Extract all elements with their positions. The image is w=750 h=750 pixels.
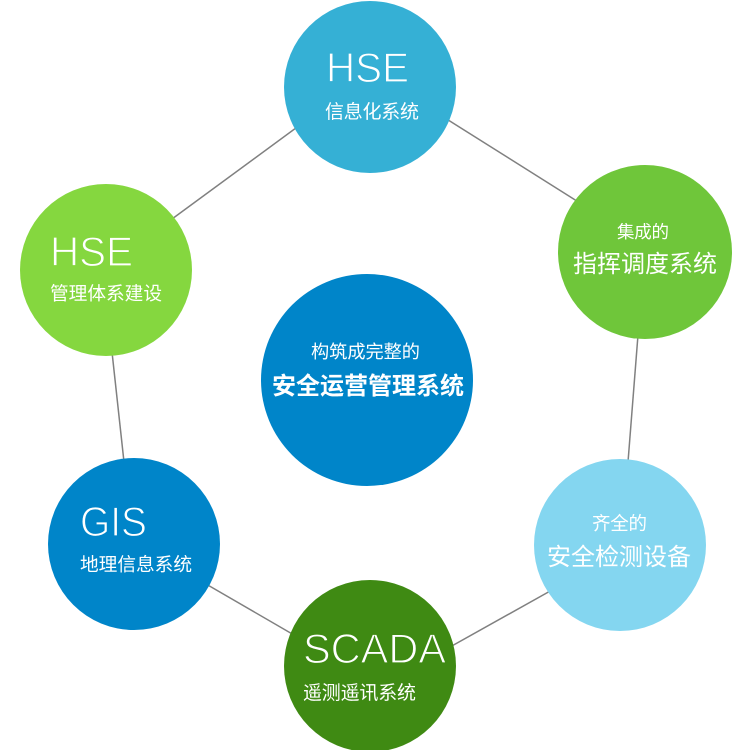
node: safety detection equipment: 齐全的 bbox=[592, 513, 647, 534]
center: safe operation management system bbox=[261, 274, 473, 486]
node: HSE information system: 信息化系统 bbox=[325, 101, 419, 123]
node: GIS bbox=[48, 458, 220, 630]
node: integrated dispatch system: 指挥调度系统 bbox=[573, 251, 717, 278]
node: HSE information system bbox=[284, 1, 456, 173]
connecting hexagon lines bbox=[112, 118, 638, 647]
node: safety detection equipment: 安全检测设备 bbox=[547, 544, 691, 571]
node: HSE management system bbox=[20, 184, 192, 356]
node: HSE management system: 管理体系建设 bbox=[50, 283, 162, 304]
node: SCADA bbox=[284, 580, 456, 750]
node: GIS: 地理信息系统 bbox=[80, 554, 192, 575]
center: safe operation management system: 构筑成完整的 bbox=[311, 342, 420, 362]
node: integrated dispatch system bbox=[558, 165, 732, 339]
node: integrated dispatch system: 集成的 bbox=[617, 222, 669, 242]
node: SCADA: SCADA bbox=[303, 625, 446, 672]
node: HSE management system: HSE bbox=[50, 228, 133, 275]
node: SCADA: 遥测遥讯系统 bbox=[303, 682, 416, 704]
node: HSE information system: HSE bbox=[326, 44, 409, 91]
node: GIS: GIS bbox=[80, 498, 147, 545]
center: safe operation management system: 安全运营管理系统 bbox=[272, 373, 464, 400]
node: safety detection equipment bbox=[534, 459, 706, 631]
